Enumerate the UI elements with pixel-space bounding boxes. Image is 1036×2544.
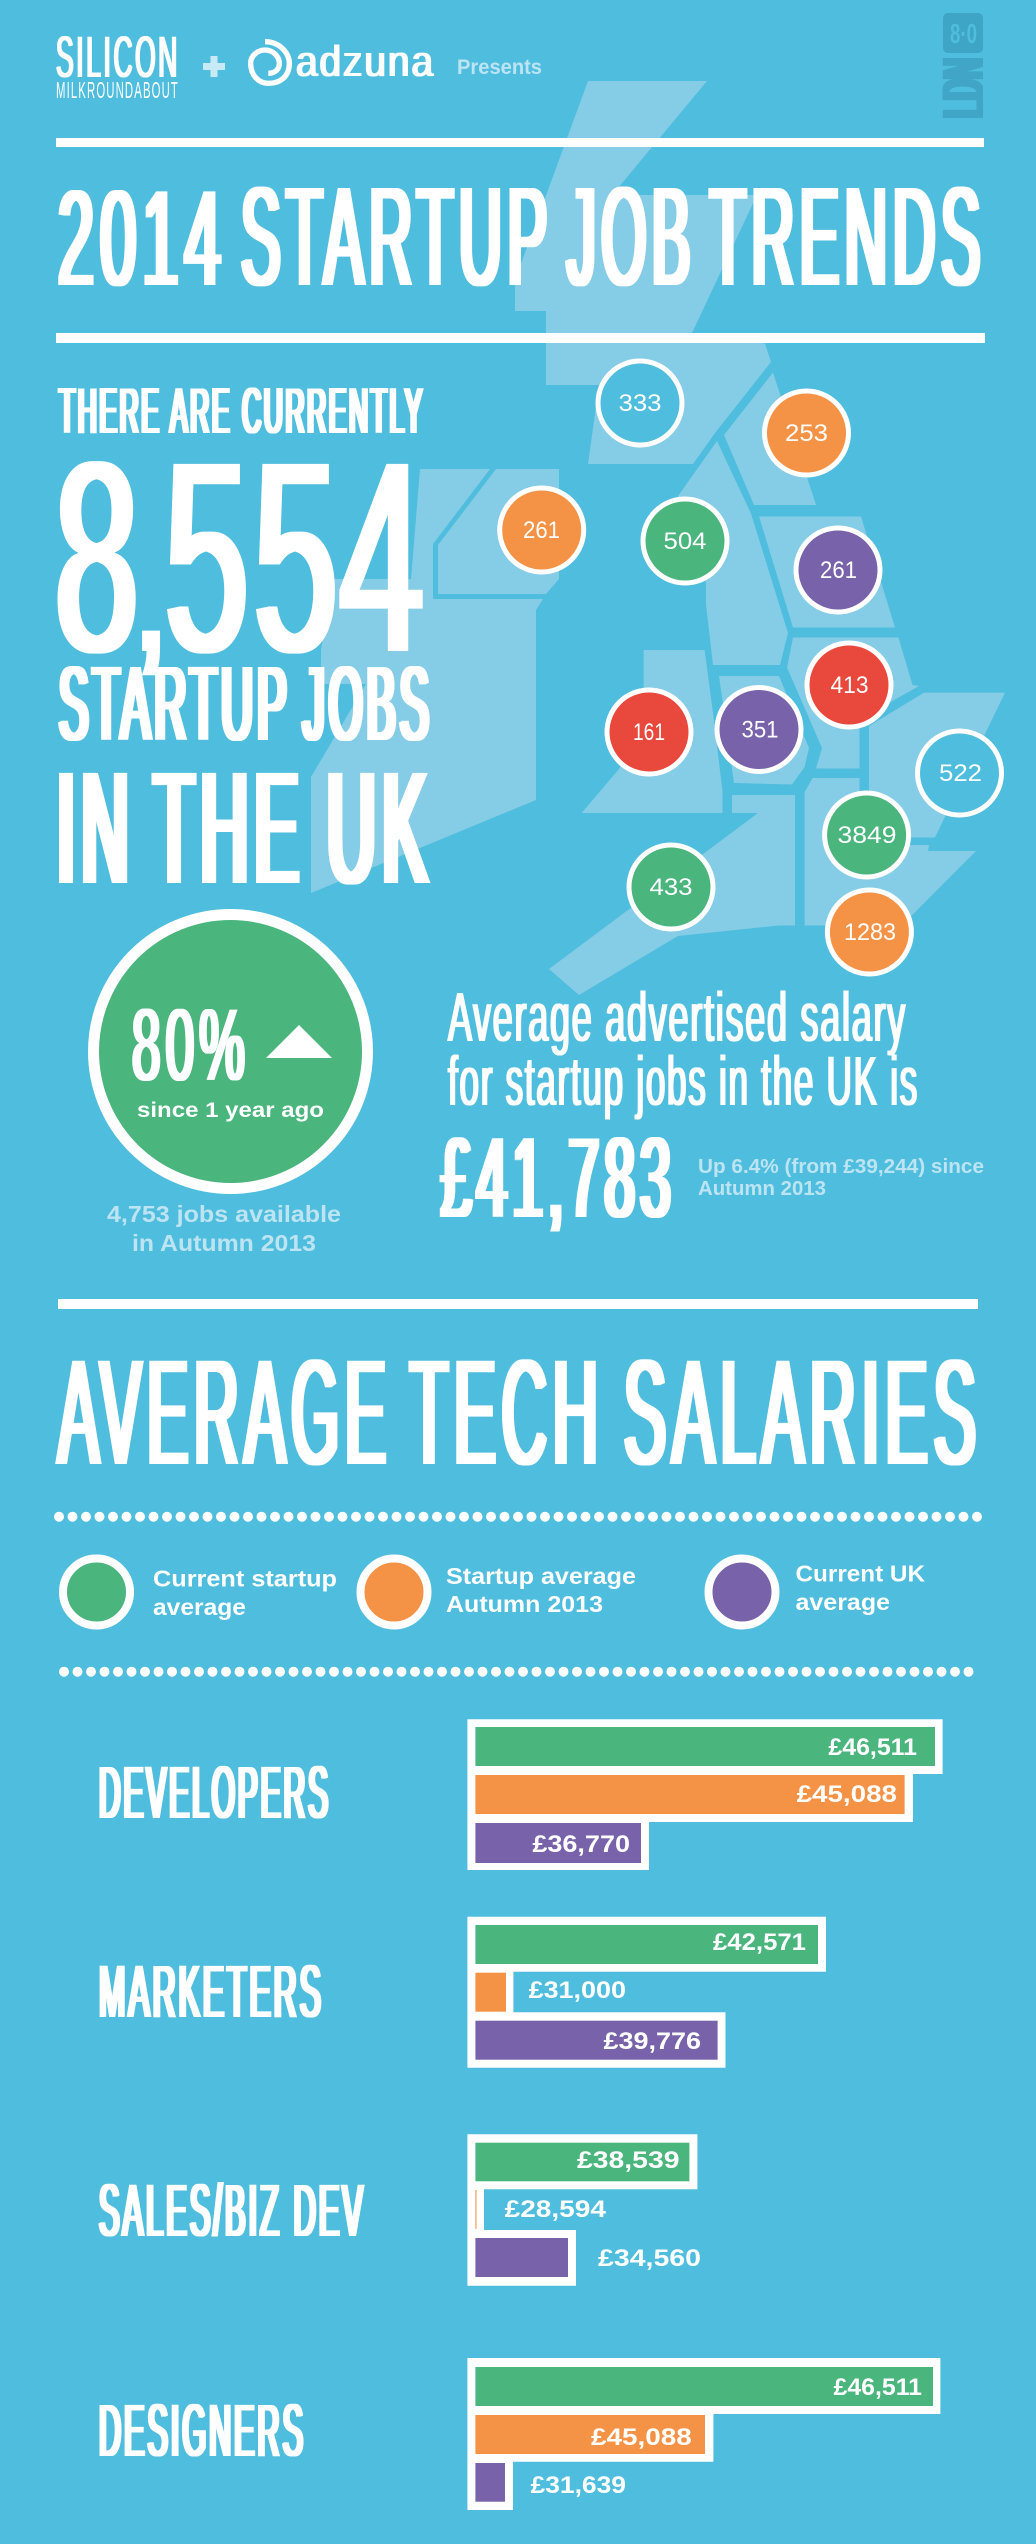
map marker values: 522 [939, 760, 982, 787]
text: SILICON [56, 25, 180, 90]
bar chart: developers: £46,511 [828, 1734, 917, 1761]
map marker values: 504 [664, 528, 706, 555]
text: jobs in Autumn 2013: 4,753 jobs available [107, 1201, 341, 1227]
group: designers: DESIGNERS [99, 2389, 306, 2472]
headline: job count: THE [154, 738, 305, 917]
logo: Silicon Milkroundabout [56, 25, 180, 103]
legend item: current startup average [63, 1558, 337, 1626]
callout: 80% growth [94, 914, 368, 1188]
headline: job count: , [136, 480, 165, 692]
headline: job count: IN [57, 738, 135, 917]
text: jobs in Autumn 2013: in Autumn 2013 [132, 1230, 316, 1256]
legend item: current startup average: average [153, 1594, 246, 1620]
bar chart: developers: £45,088 [797, 1781, 897, 1808]
text: JOBS [303, 645, 433, 763]
text: Presents: Presents [457, 56, 542, 79]
text: THERE ARE CURRENTLY [59, 374, 425, 447]
group: marketers [99, 1917, 826, 2068]
text: average advertised salary: £41,783 [441, 1115, 676, 1242]
callout: 80% growth: 80% [132, 988, 250, 1102]
map marker values: 1283 [844, 919, 896, 946]
legend item: startup average Autumn 2013: Startup average [446, 1563, 636, 1589]
legend item: startup average Autumn 2013: Autumn 2013 [446, 1591, 603, 1617]
legend item: current UK average: Current UK [796, 1561, 925, 1587]
map: UK regions [311, 81, 1005, 995]
bar chart: designers: £31,639 [530, 2472, 626, 2499]
map marker values: 3849 [838, 822, 896, 849]
map marker values: 161 [633, 719, 665, 746]
bar chart: designers: £45,088 [591, 2424, 692, 2451]
title: STARTUP [241, 157, 553, 315]
title: JOB [567, 157, 696, 315]
legend item: current UK average: average [796, 1589, 890, 1615]
text: jobs in Autumn 2013 [107, 1201, 341, 1256]
bar chart: developers: £36,770 [532, 1831, 630, 1858]
map marker values: 253 [785, 420, 828, 447]
group: developers: DEVELOPERS [99, 1751, 331, 1834]
logo: adzuna: adzuna [296, 37, 435, 86]
bar chart: sales/biz dev: £28,594 [505, 2196, 607, 2223]
legend item: current UK average [708, 1558, 925, 1626]
section heading: average tech salaries: AVERAGE [58, 1328, 392, 1496]
map marker values: 351 [742, 716, 778, 744]
text: salary change note: Autumn 2013 [698, 1178, 826, 1200]
map marker values: 433 [650, 874, 692, 901]
map marker values [523, 390, 982, 946]
section rule [58, 1299, 978, 1309]
headline: job count: 4 [340, 404, 423, 709]
bar chart: marketers: £31,000 [529, 1977, 626, 2004]
text: UK [327, 738, 434, 917]
text: salary change note [698, 1156, 984, 1200]
group: sales and business development: SALES/BIZ DEV [99, 2169, 366, 2252]
group: marketers: MARKETERS [99, 1950, 324, 2033]
plus sign [203, 56, 225, 77]
legend item: current startup average: Current startup [153, 1566, 337, 1592]
header rule top [56, 138, 984, 147]
group: sales and business development [99, 2134, 701, 2286]
header rule bottom [56, 333, 985, 343]
bar chart: developers [467, 1719, 943, 1870]
map marker values: 261 [523, 517, 560, 544]
headline: job count: 5 [254, 404, 337, 709]
legend [63, 1558, 925, 1626]
bar chart: sales/biz dev [467, 2134, 701, 2286]
text: average advertised salary [441, 978, 919, 1242]
bar chart: marketers: £42,571 [713, 1929, 806, 1956]
bar chart: designers: £46,511 [834, 2374, 922, 2401]
headline: job count [55, 374, 434, 917]
group: designers [99, 2358, 940, 2510]
logo: adzuna [251, 37, 435, 86]
bar chart: marketers: £39,776 [604, 2028, 701, 2055]
headline: job count: 5 [165, 404, 248, 709]
text: MILKROUNDABOUT [56, 77, 179, 103]
legend item: startup average Autumn 2013 [360, 1558, 636, 1626]
map marker values: 261 [820, 557, 857, 584]
headline: job count: 8 [55, 404, 138, 709]
badge: LDN 8-0: 8·0 [950, 18, 977, 49]
bar chart: sales/biz dev: £34,560 [598, 2245, 701, 2272]
callout: 80% growth: since 1 year ago [137, 1099, 324, 1122]
group: developers [99, 1719, 943, 1870]
bar chart: designers [467, 2358, 940, 2510]
map marker values: 413 [830, 672, 868, 699]
section heading: average tech salaries: TECH [410, 1328, 604, 1496]
bar chart: marketers [467, 1917, 826, 2068]
title: 2014 [58, 162, 227, 314]
bar chart: sales/biz dev: £38,539 [577, 2147, 680, 2174]
map markers: regional job counts [500, 361, 1002, 974]
map marker values: 333 [618, 390, 662, 417]
headline: job count: STARTUP [59, 645, 291, 763]
text: salary change note: Up 6.4% (from £39,244) since [698, 1156, 984, 1178]
badge: LDN 8-0: LDN [931, 58, 996, 118]
